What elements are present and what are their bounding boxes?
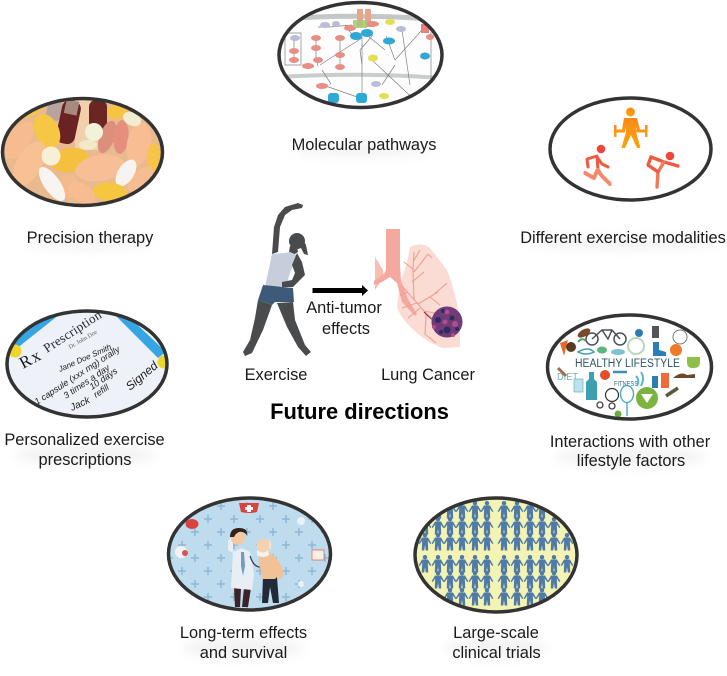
ellipse border [7,311,167,417]
doctor body [234,588,251,607]
ellipse border [548,315,712,419]
ellipse border [550,98,711,200]
patient body [262,577,279,603]
illustration: woman stretching [243,203,311,356]
label: personalized exercise prescriptions: Personalized exercise [4,431,165,449]
label: personalized exercise prescriptions: prescriptions [39,451,131,469]
label: precision therapy: Precision therapy [27,229,154,247]
image: healthy lifestyle collage [557,326,700,417]
title: Future directions [270,399,449,424]
ellipse border [415,498,577,612]
label: large-scale clinical trials: clinical trials [452,644,541,662]
image: prescription note: Signed [123,358,161,393]
image: prescription note [9,313,166,415]
image: prescription note: Jack [68,395,93,414]
image: prescription note: Jane Doe Smith [56,342,113,374]
label: large-scale clinical trials: Large-scale [453,624,539,642]
image: prescription note: Dr. John Doe [68,329,99,351]
image: healthy lifestyle collage: HEALTHY LIFESTYLE [575,358,680,370]
image: rows of people [416,500,576,610]
label: anti-tumor effects [306,299,382,338]
panel: large-scale clinical trials [410,495,582,662]
label: long-term effects and survival [180,624,307,662]
label: long-term effects and survival: Long-term effects [180,624,307,642]
panel: personalized exercise prescriptions [0,305,175,469]
image: doctor and patient [170,500,329,608]
image: pills [4,100,161,204]
label: molecular pathways: Molecular pathways [292,136,436,154]
panel: different exercise modalities [520,98,726,249]
panel: long-term effects and survival [165,495,335,662]
image: healthy lifestyle collage: FITNESS [614,381,638,388]
label: different exercise modalities: Different exercise modalities [520,229,726,247]
label: large-scale clinical trials [446,624,546,662]
label: lung cancer: Lung Cancer [381,366,475,384]
ellipse border [168,498,330,610]
image: prescription note: refill [92,382,112,400]
image: prescription note: 1 capsule (xxx mg) orally [33,344,122,407]
label: anti-tumor effects: Anti-tumor [306,299,382,317]
panel: interactions with other lifestyle factors [545,312,715,470]
label: interactions with other lifestyle factors: Interactions with other [550,433,711,451]
image: prescription note: 10 days [88,365,120,392]
label: personalized exercise prescriptions [4,431,165,469]
panel: precision therapy [0,95,165,249]
image: prescription note: Prescription [40,307,105,356]
ellipse border [2,98,162,206]
label: exercise: Exercise [245,366,307,384]
ellipse border [279,2,442,108]
panel: centre illustration [243,203,475,384]
label: interactions with other lifestyle factors [550,433,711,470]
label: interactions with other lifestyle factors: lifestyle factors [577,452,685,470]
image: signalling pathway diagram [284,9,434,103]
image: healthy lifestyle collage: DIET [557,372,578,383]
illustration: lungs with tumor [374,229,462,348]
label: long-term effects and survival: and survival [200,644,287,662]
panel: molecular pathways [275,0,445,156]
icon: runner [585,145,610,184]
image: prescription note: 3 times a day [62,362,112,401]
arrow: exercise to lung cancer [312,285,368,296]
image: prescription note: Rx [16,345,45,373]
icon: weightlifter [614,108,648,148]
label: anti-tumor effects: effects [322,320,370,338]
icon: yoga figure [648,152,678,187]
